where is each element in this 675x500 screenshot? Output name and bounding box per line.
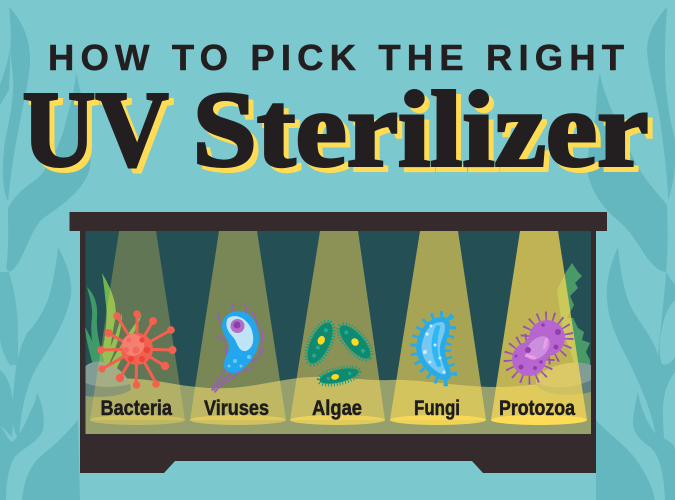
aquarium tank: [70, 212, 607, 473]
kelp: right background: [587, 7, 675, 500]
beam 2: [190, 231, 286, 420]
kelp: left background: [0, 7, 91, 500]
tank frame: [70, 212, 607, 473]
label: Protozoa: Protozoa: [499, 397, 575, 420]
algae cell 2: [335, 321, 375, 363]
title: UV Sterilizer: UV: [22, 70, 168, 190]
virus: [212, 304, 263, 392]
title: UV Sterilizer: Sterilizer: [192, 70, 648, 190]
beam pool 4: [390, 415, 486, 425]
gravel bed: [86, 377, 591, 434]
beam pool 5: [491, 415, 587, 425]
algae cell 1: [302, 319, 338, 367]
right plant: [557, 263, 590, 366]
algae cell 3: [318, 365, 360, 387]
beam 1: [90, 231, 185, 420]
left plant: [85, 273, 142, 372]
beam pool 1: [90, 415, 185, 425]
beam pool 3: [290, 415, 385, 425]
protozoa: [512, 320, 565, 376]
label: Viruses: Viruses: [204, 397, 269, 420]
left rock: [86, 362, 131, 397]
label: Algae: Algae: [312, 397, 362, 420]
title: UV Sterilizer: UV: [28, 76, 174, 194]
light beams: [90, 231, 587, 425]
fungi: [417, 318, 450, 379]
label: Bacteria: Bacteria: [100, 397, 172, 420]
beam pool 2: [190, 415, 286, 425]
beam 3: [290, 231, 385, 420]
algae: [302, 319, 375, 387]
title: UV Sterilizer: [22, 70, 654, 194]
title: how to pick the right: HOW TO PICK THE RIGHT: [48, 37, 624, 78]
right rock: [536, 363, 591, 395]
bacteria: [97, 310, 176, 389]
tank water: [86, 231, 591, 434]
beam 5: [491, 231, 587, 420]
title: UV Sterilizer: Sterilizer: [198, 76, 654, 194]
beam 4: [390, 231, 486, 420]
label: Fungi: Fungi: [414, 397, 460, 420]
